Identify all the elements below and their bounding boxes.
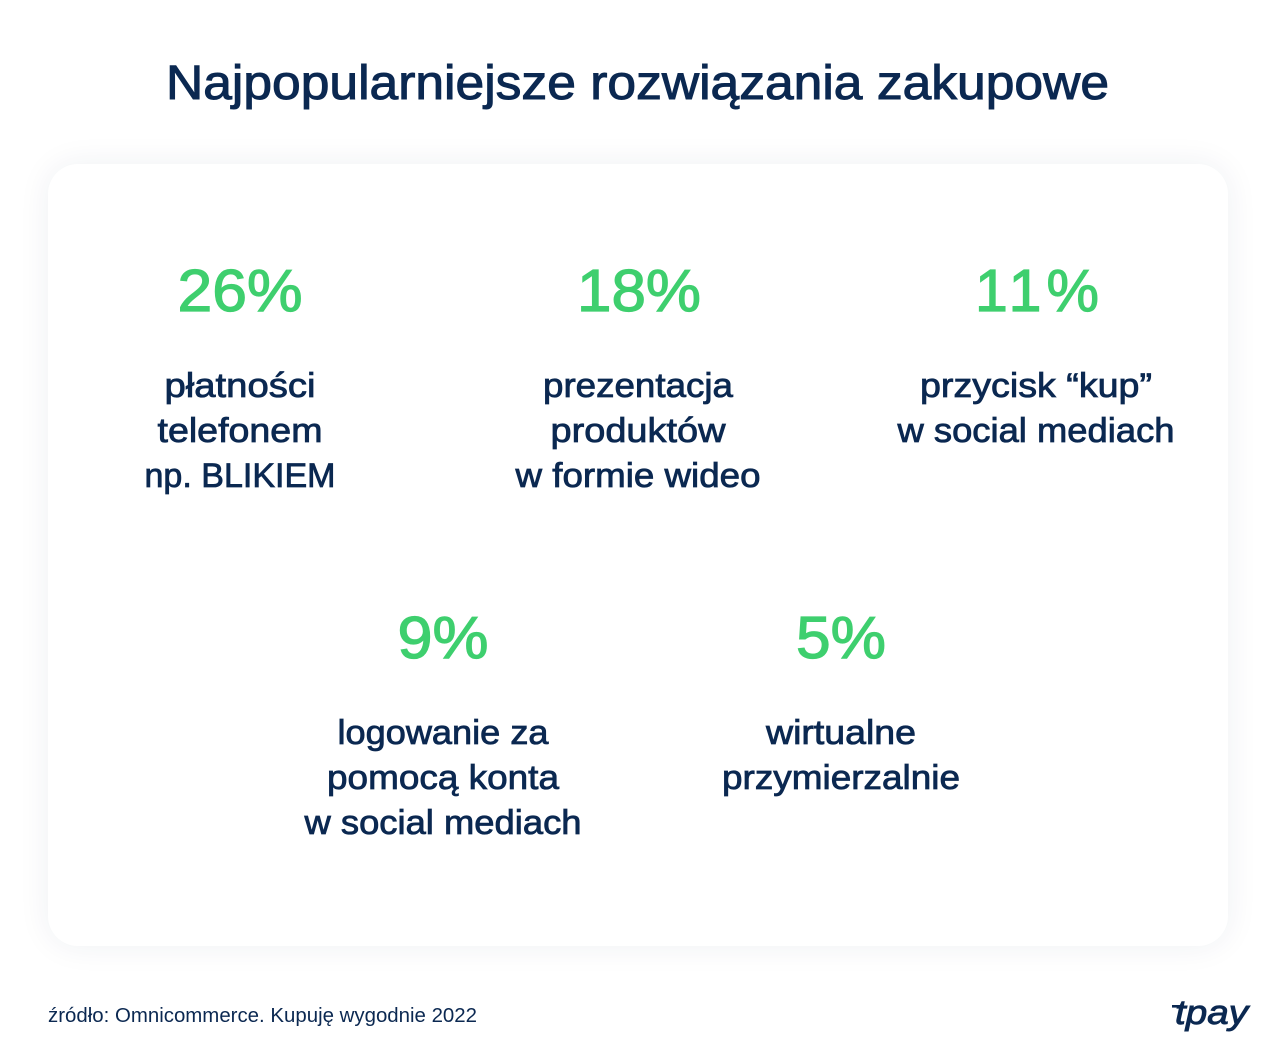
label: phone payments: np. BLIKIEM [144, 457, 336, 495]
label: buy button: w social mediach [896, 412, 1174, 450]
stat: 26% phone payments [144, 258, 336, 495]
stat: 9% social login [303, 605, 582, 842]
label: product video [514, 367, 760, 495]
label: virtual fitting rooms [722, 714, 960, 797]
value: 5%: 5% [796, 605, 886, 671]
label: virtual fitting rooms: wirtualne [765, 714, 916, 752]
stat: 5% virtual fitting rooms [722, 605, 960, 797]
label: buy button: przycisk “kup” [920, 367, 1152, 405]
value: 26%: 26% [178, 258, 302, 324]
source note: źródło: Omnicommerce. Kupuję wygodnie 2022 [48, 1005, 477, 1027]
value: 9%: 9% [398, 605, 488, 671]
title: Najpopularniejsze rozwiązania zakupowe [166, 57, 1109, 110]
label: product video: w formie wideo [514, 457, 760, 495]
label: phone payments: płatności [164, 367, 316, 405]
label: phone payments [144, 367, 336, 495]
label: social login: pomocą konta [327, 759, 559, 797]
panel: white card [48, 164, 1228, 946]
label: phone payments: telefonem [158, 412, 322, 450]
label: buy button [896, 367, 1174, 450]
label: social login: logowanie za [338, 714, 549, 752]
value: 11%: 11% [975, 258, 1099, 324]
label: social login [303, 714, 582, 842]
value: 18%: 18% [577, 258, 701, 324]
label: virtual fitting rooms: przymierzalnie [722, 759, 960, 797]
stat: 11% buy button [896, 258, 1174, 450]
label: product video: prezentacja [543, 367, 733, 405]
logo: tpay: tpay [1175, 994, 1250, 1032]
stat: 18% product video [514, 258, 760, 495]
label: social login: w social mediach [303, 804, 582, 842]
label: product video: produktów [550, 412, 726, 450]
